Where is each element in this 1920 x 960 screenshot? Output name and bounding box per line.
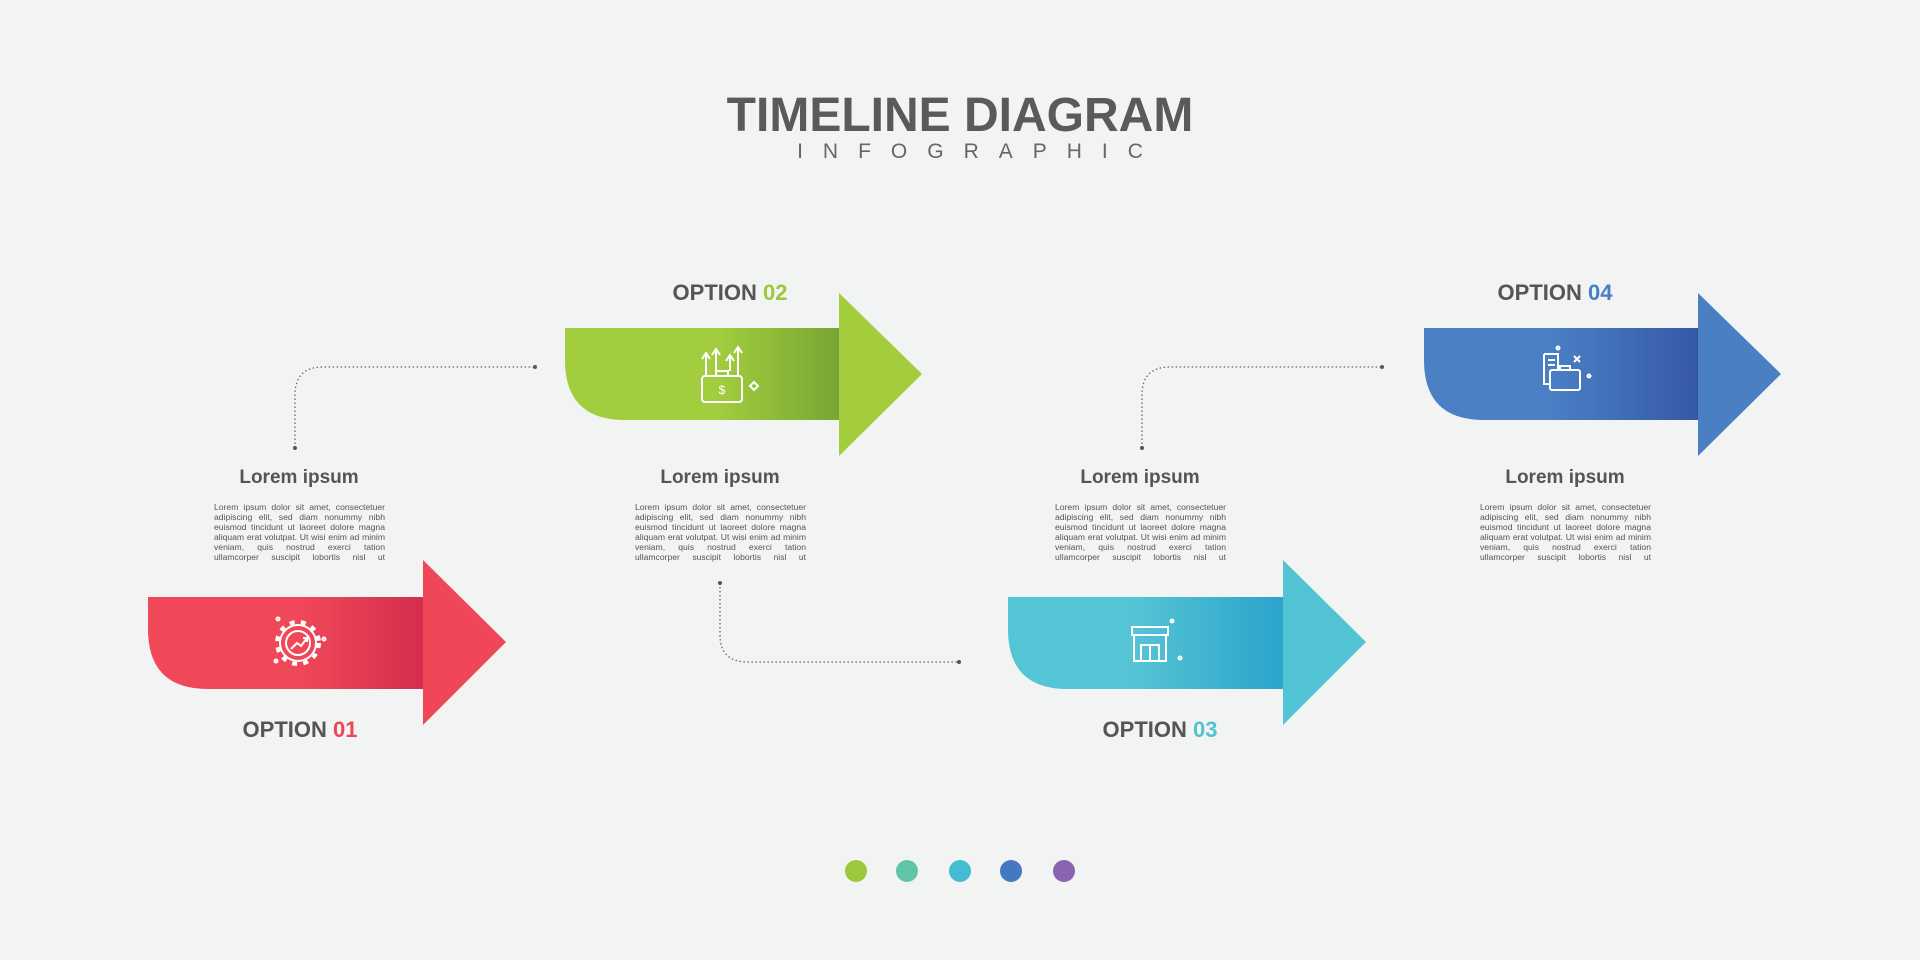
option label 02: OPTION 02 <box>673 280 787 305</box>
text block 3: Lorem ipsum <box>1080 467 1200 488</box>
option label 01: OPTION 01 <box>243 717 357 742</box>
option label 04: OPTION 04 <box>1498 280 1612 305</box>
text block 1 <box>214 467 386 562</box>
icon: briefcase growth <box>702 347 758 402</box>
option label 03: OPTION 03 <box>1103 717 1217 742</box>
icon: briefcase documents <box>1544 346 1590 390</box>
color dots <box>845 860 1075 882</box>
text block 1: Lorem ipsum <box>239 467 359 488</box>
text block 3 <box>1055 467 1226 562</box>
text block 3: Lorem ipsum dolor sit amet, consectetuer adipiscing elit, sed diam nonummy nibh euismod tincidunt ut laoreet dolore magna aliquam erat volutpat. Ut wisi enim ad minim veniam, quis nostrud exerci tation ullamcorper suscipit lobortis nisl ut <box>1055 502 1226 562</box>
subtitle: INFOGRAPHIC <box>797 140 1163 163</box>
arrow: option 01 <box>148 560 506 725</box>
arrow: option 04 <box>1424 293 1781 456</box>
text block 1: Lorem ipsum dolor sit amet, consectetuer adipiscing elit, sed diam nonummy nibh euismod tincidunt ut laoreet dolore magna aliquam erat volutpat. Ut wisi enim ad minim veniam, quis nostrud exerci tation ullamcorper suscipit lobortis nisl ut <box>214 502 385 562</box>
arrow: option 02 <box>565 293 922 456</box>
icon: store <box>1132 620 1182 661</box>
text block 4: Lorem ipsum dolor sit amet, consectetuer adipiscing elit, sed diam nonummy nibh euismod tincidunt ut laoreet dolore magna aliquam erat volutpat. Ut wisi enim ad minim veniam, quis nostrud exerci tation ullamcorper suscipit lobortis nisl ut <box>1480 502 1651 562</box>
text block 4: Lorem ipsum <box>1505 467 1625 488</box>
text block 2: Lorem ipsum <box>660 467 780 488</box>
arrow: option 03 <box>1008 560 1366 725</box>
icon: gear chart <box>274 618 326 664</box>
text block 2 <box>635 467 806 562</box>
text block 4 <box>1480 467 1652 562</box>
icon: briefcase growth: $ <box>719 383 726 397</box>
title: TIMELINE DIAGRAM <box>727 89 1193 142</box>
text block 2: Lorem ipsum dolor sit amet, consectetuer adipiscing elit, sed diam nonummy nibh euismod tincidunt ut laoreet dolore magna aliquam erat volutpat. Ut wisi enim ad minim veniam, quis nostrud exerci tation ullamcorper suscipit lobortis nisl ut <box>635 502 806 562</box>
